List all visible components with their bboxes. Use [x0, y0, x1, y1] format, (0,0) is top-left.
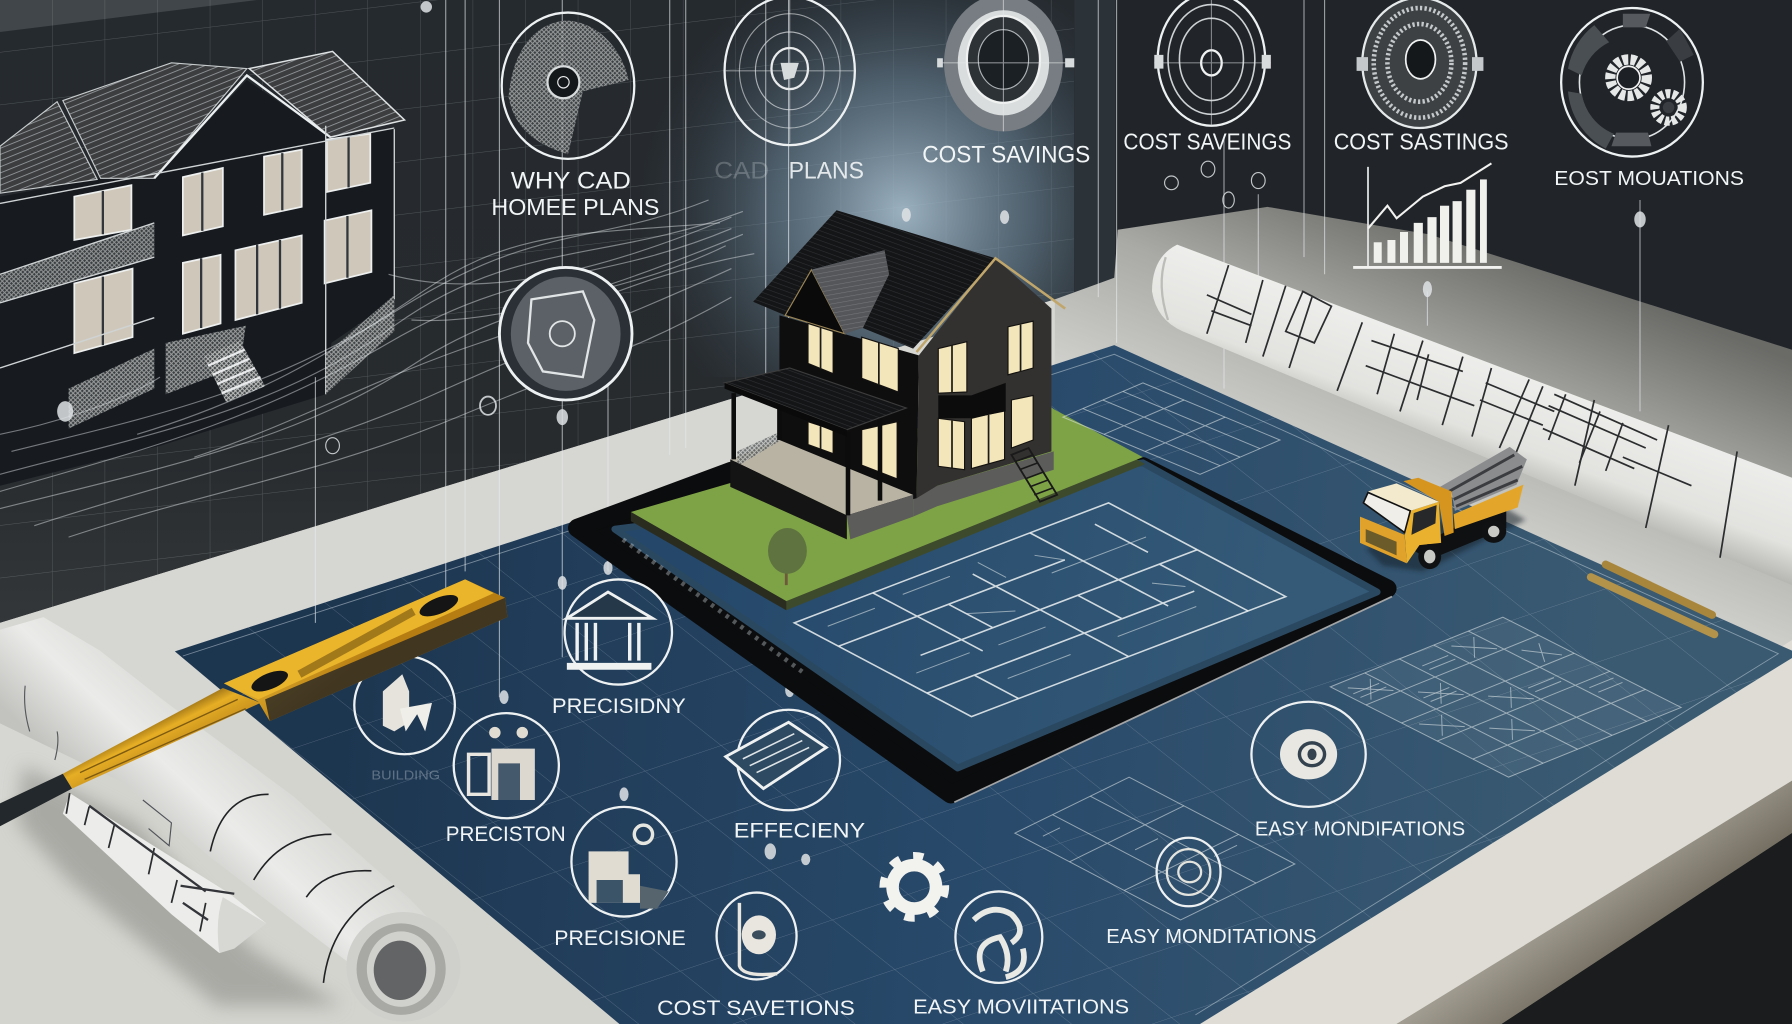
label: precisione: PRECISIONE	[554, 925, 686, 950]
bubble windows	[249, 666, 291, 696]
small front roll	[63, 793, 266, 953]
roll shadow	[17, 766, 343, 1006]
mat sketch: top plans	[1063, 383, 1280, 474]
yellow bed	[1454, 485, 1523, 529]
small pointer markers	[57, 1, 1646, 865]
truck	[1360, 447, 1527, 571]
icon: white gear	[883, 856, 945, 918]
floor plan	[794, 503, 1286, 717]
main roof	[63, 63, 247, 178]
faint mat note: BUILDING	[371, 768, 440, 782]
desk side	[1397, 781, 1792, 1024]
porch roof	[725, 368, 906, 430]
top icon: why CAD	[502, 13, 634, 159]
model house	[725, 210, 1065, 539]
stone foundation right	[913, 451, 1054, 517]
top icon: CAD plans	[725, 0, 855, 145]
windows	[808, 321, 1033, 479]
roll end	[346, 912, 461, 1022]
label: preciston: PRECISTON	[446, 821, 566, 846]
mat sketch: large plan	[1330, 617, 1681, 777]
side window	[1411, 505, 1437, 535]
right facade	[917, 258, 1051, 498]
label: precisidny: PRECISIDNY	[552, 693, 686, 718]
label: effecieny: EFFECIENY	[734, 818, 865, 843]
mat icon: building	[571, 807, 677, 917]
porch floor	[730, 440, 913, 515]
right gable trim	[917, 258, 1065, 352]
mat icon: chair figure	[354, 656, 455, 754]
cab side	[1405, 502, 1441, 563]
blueprint mat	[175, 345, 1792, 1024]
tablet	[577, 463, 1392, 802]
label: cost savetions: COST SAVETIONS	[657, 995, 855, 1020]
mat icon: rings	[1157, 838, 1221, 906]
stairs	[203, 341, 265, 402]
grass base	[631, 394, 1145, 610]
desk surface	[0, 207, 1792, 1024]
dormer roof	[811, 250, 889, 334]
hanging pointer lines	[315, 0, 1640, 697]
wall background	[0, 0, 1792, 640]
label: why CAD: WHY CAD	[511, 168, 631, 195]
top icon: cost sastings	[1357, 0, 1483, 128]
wheels	[1418, 544, 1441, 569]
porch railing	[737, 432, 779, 466]
label: cost savings: COST SAVINGS	[922, 141, 1090, 168]
grille	[1366, 529, 1397, 555]
wall icon: mid circle	[499, 267, 632, 400]
main roof	[753, 210, 995, 349]
balcony	[0, 223, 154, 303]
dormer gable	[785, 270, 845, 334]
porch posts	[734, 377, 880, 515]
top icon: cost savings two	[1154, 0, 1271, 126]
label: easy monditations upper: EASY MONDIFATIONS	[1255, 817, 1465, 840]
cargo logs	[1440, 447, 1527, 511]
desk front edge	[1189, 640, 1792, 1024]
windshield	[1363, 493, 1410, 533]
mat icon: temple	[565, 579, 672, 685]
cab roof	[1368, 483, 1439, 511]
pencils	[1591, 565, 1714, 634]
cab front	[1360, 517, 1407, 563]
wireframe flow lines	[0, 200, 754, 537]
top icon: gears	[1561, 8, 1703, 157]
tree	[768, 528, 807, 585]
ladder steps	[1011, 448, 1057, 502]
left facade	[779, 315, 919, 515]
screen	[615, 463, 1377, 768]
body	[224, 579, 507, 721]
label: easy movitations: EASY MOVIITATIONS	[913, 996, 1129, 1019]
trend line	[1368, 163, 1491, 229]
porch base	[730, 459, 847, 539]
roof left wing	[0, 102, 97, 193]
mat icon: target eye	[1251, 702, 1366, 807]
mat icon: drawing board	[726, 710, 840, 810]
bar chart	[1353, 163, 1502, 267]
large wireframe house on wall	[0, 51, 405, 486]
label: CAD plans: CAD	[714, 157, 769, 184]
floor corner	[1502, 833, 1792, 1024]
foundation	[69, 295, 394, 429]
label: CAD plans	[714, 157, 864, 184]
under chassis	[1411, 509, 1506, 560]
label: cost savengs: COST SAVEINGS	[1123, 129, 1291, 155]
right rolled blueprint	[1152, 245, 1792, 585]
label: CAD plans: PLANS	[789, 157, 864, 184]
mat icon: knot	[955, 891, 1042, 983]
yellow level tool	[0, 579, 507, 826]
band between floors	[938, 383, 1006, 418]
label: cost sastings: COST SASTINGS	[1334, 129, 1509, 155]
label: home plans: HOMEE PLANS	[491, 194, 659, 220]
mat icon: spiral	[717, 893, 797, 979]
top icon: cost savings	[937, 0, 1074, 131]
mat sketch: small plan	[1015, 777, 1295, 920]
left rolled blueprint	[0, 617, 461, 1022]
label: eost mouations: EOST MOUATIONS	[1554, 167, 1744, 190]
windows	[74, 134, 371, 353]
right roof	[249, 51, 405, 137]
big roll	[0, 617, 457, 1019]
mat icon: machine	[454, 713, 559, 818]
strap	[63, 688, 261, 789]
label: easy monditations lower: EASY MONDITATIONS	[1106, 925, 1317, 948]
